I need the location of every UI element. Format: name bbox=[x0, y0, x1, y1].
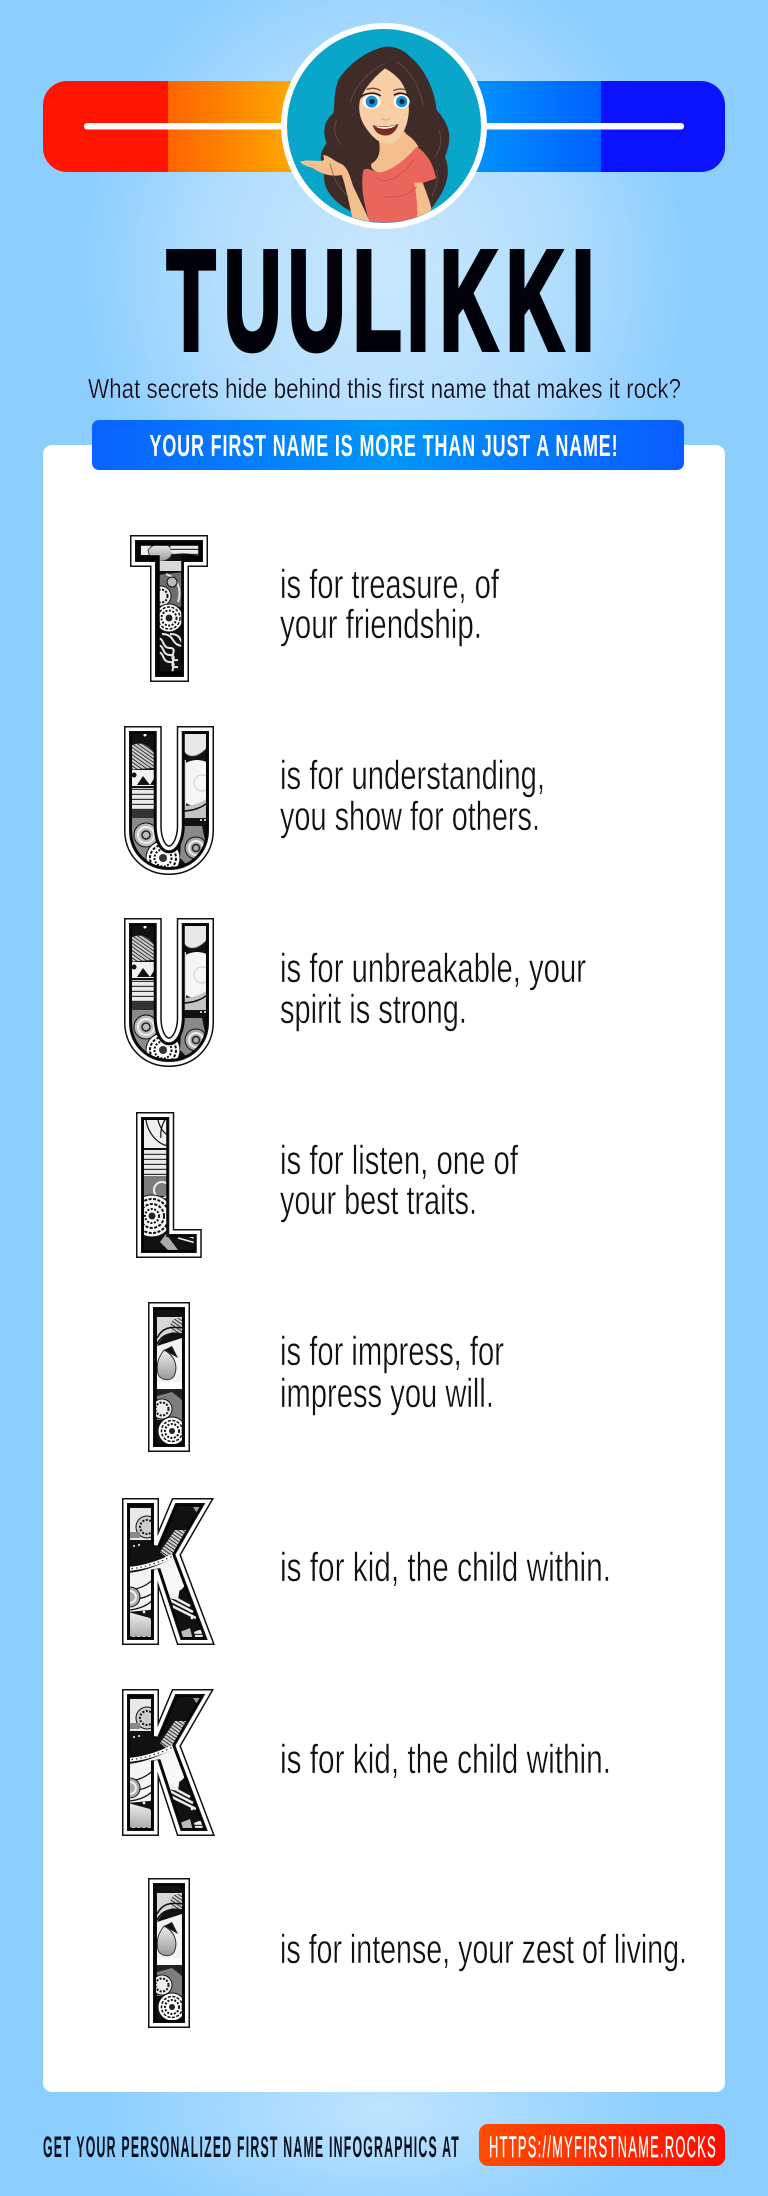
eyes bbox=[361, 88, 410, 109]
row: letter L bbox=[131, 1112, 518, 1258]
mouth bbox=[373, 124, 398, 136]
banner bbox=[92, 420, 684, 470]
text: I line: is for impress, for bbox=[280, 1328, 504, 1374]
row: second letter U bbox=[124, 918, 586, 1067]
text: I line: impress you will. bbox=[280, 1370, 494, 1416]
text: second U line bbox=[280, 945, 586, 1032]
row: letter U bbox=[124, 726, 545, 875]
text: T line: your friendship. bbox=[280, 601, 482, 647]
icon: mandala letter K bbox=[120, 1496, 215, 1646]
icon: mandala letter U, second bbox=[124, 918, 220, 1067]
text: second K line: is for kid, the child within. bbox=[280, 1736, 611, 1782]
nose bbox=[382, 118, 390, 120]
white panel bbox=[43, 445, 725, 2092]
row: second letter K bbox=[120, 1687, 611, 1837]
face bbox=[359, 68, 409, 144]
icon: mandala letter U bbox=[124, 726, 220, 875]
text: second U line: spirit is strong. bbox=[280, 986, 467, 1032]
header bar bbox=[43, 81, 725, 172]
footer button bbox=[479, 2124, 725, 2166]
row: letter T bbox=[130, 535, 499, 682]
shirt bbox=[362, 147, 436, 223]
icon: mandala letter K, second bbox=[120, 1687, 215, 1837]
icon: mandala letter I, second bbox=[148, 1878, 190, 2028]
icon: mandala letter T bbox=[130, 535, 208, 682]
text: L line: is for listen, one of bbox=[280, 1137, 518, 1183]
row: letter K bbox=[120, 1496, 611, 1646]
icon: mandala letter L bbox=[131, 1112, 202, 1258]
text: second U line: is for unbreakable, your bbox=[280, 945, 586, 991]
right arm bbox=[414, 182, 432, 217]
text: U line: you show for others. bbox=[280, 793, 540, 839]
neck and left arm bbox=[300, 132, 418, 222]
row: second letter I bbox=[148, 1878, 687, 2028]
text: I line bbox=[280, 1328, 504, 1416]
icon: mandala letter I bbox=[148, 1302, 190, 1452]
text: T line bbox=[280, 561, 499, 647]
title: TUULIKKI bbox=[167, 223, 594, 380]
hair bbox=[321, 47, 449, 220]
text: K line: is for kid, the child within. bbox=[280, 1544, 611, 1590]
text: U line: is for understanding, bbox=[280, 752, 545, 798]
avatar: woman in circle bbox=[284, 26, 484, 226]
row: letter I bbox=[148, 1302, 504, 1452]
text: L line bbox=[280, 1137, 518, 1223]
text: U line bbox=[280, 752, 545, 839]
text: T line: is for treasure, of bbox=[280, 561, 499, 607]
hair highlights bbox=[330, 62, 441, 197]
text: L line: your best traits. bbox=[280, 1177, 477, 1223]
